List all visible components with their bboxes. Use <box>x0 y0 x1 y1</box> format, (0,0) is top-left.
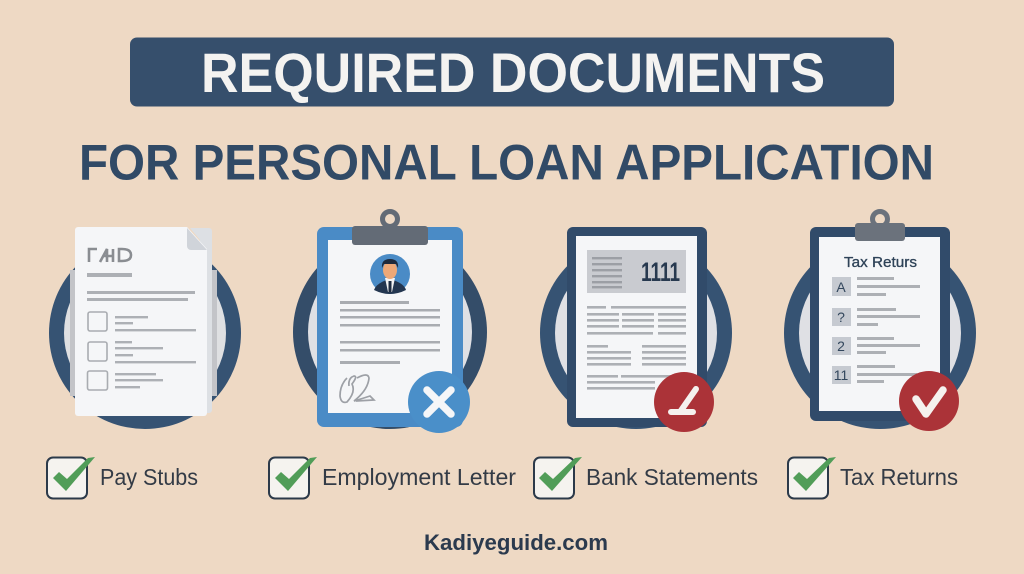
label: employment letter: Employment Letter <box>322 464 516 490</box>
signature <box>340 375 374 402</box>
label: pay stubs <box>47 457 198 498</box>
label: tax returns <box>788 457 958 498</box>
icon: employment letter clipboard <box>293 212 487 433</box>
footer website: Kadiyeguide.com <box>424 530 608 555</box>
document heading: Tax Returs <box>844 255 917 271</box>
subtitle: FOR PERSONAL LOAN APPLICATION <box>79 134 934 190</box>
badge: red mark <box>654 372 714 432</box>
label: tax returns: Tax Returns <box>840 464 958 490</box>
badge: check <box>899 371 959 431</box>
icon: tax returns clipboard: ? <box>837 309 845 325</box>
icon: tax returns clipboard: A <box>836 279 846 295</box>
icon: bank statements <box>540 227 732 432</box>
clip <box>352 212 428 245</box>
avatar <box>370 254 410 294</box>
label: pay stubs: Pay Stubs <box>100 464 198 490</box>
icon: tax returns clipboard <box>784 212 976 431</box>
icon: bank statements: 1111 <box>641 257 680 287</box>
clip <box>855 212 905 241</box>
title banner: REQUIRED DOCUMENTS <box>201 41 825 104</box>
label: bank statements: Bank Statements <box>586 464 758 490</box>
icon: tax returns clipboard: 11 <box>834 367 848 383</box>
label: employment letter <box>269 457 516 498</box>
icon: tax returns clipboard: 2 <box>837 338 845 354</box>
icon: pay stubs document <box>49 227 241 429</box>
label: bank statements <box>534 457 758 498</box>
badge: x <box>408 371 470 433</box>
